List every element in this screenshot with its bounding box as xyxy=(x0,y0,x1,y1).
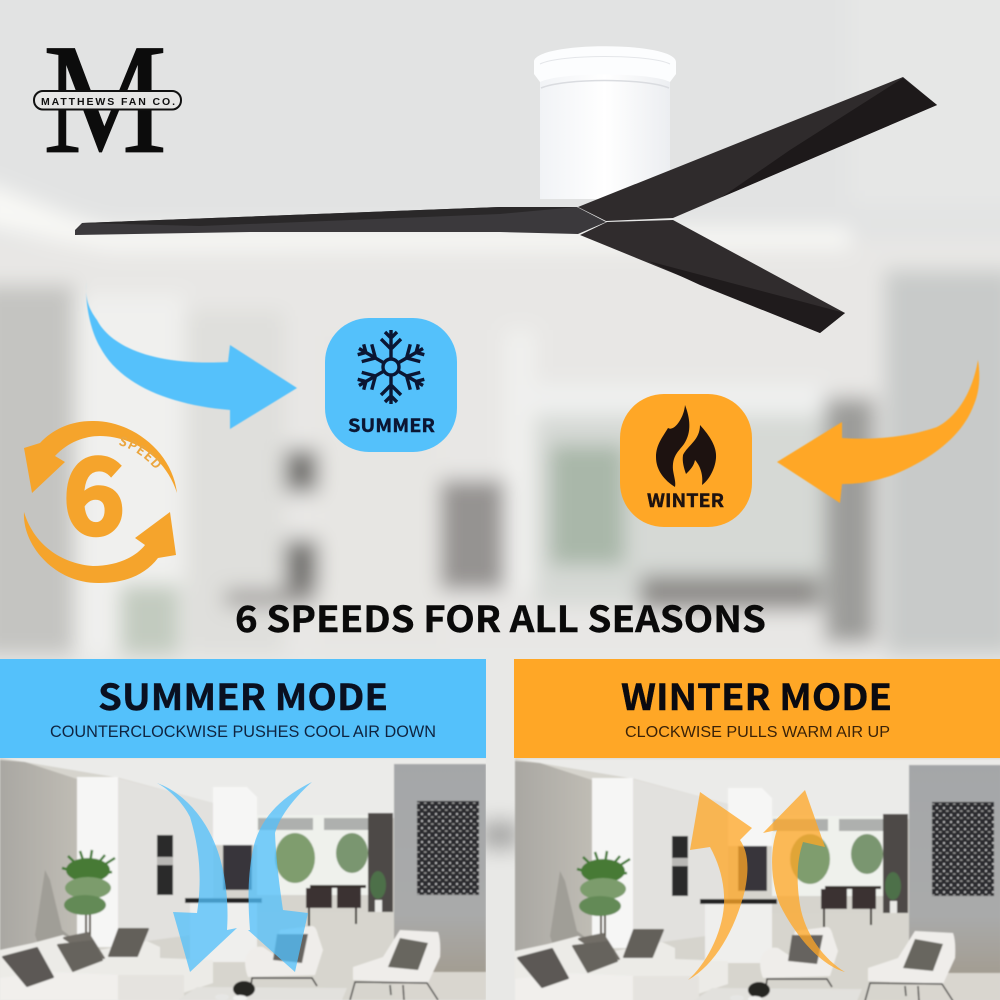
summer header: COUNTERCLOCKWISE PUSHES COOL AIR DOWN xyxy=(50,723,436,741)
winter header: WINTER MODE xyxy=(621,669,892,721)
bottom rotation arrow xyxy=(24,512,176,583)
summer header xyxy=(0,659,486,758)
summer header: SUMMER MODE xyxy=(98,669,388,721)
winter header: CLOCKWISE PULLS WARM AIR UP xyxy=(625,724,890,741)
panel: summer mode xyxy=(0,659,486,1000)
summer badge: SUMMER xyxy=(348,412,435,438)
fan blade lower xyxy=(580,220,845,333)
fan motor housing xyxy=(534,46,676,199)
panel: winter mode xyxy=(514,659,1000,1000)
6 speed icon xyxy=(24,413,177,583)
winter badge xyxy=(620,394,752,527)
top rotation arrow xyxy=(24,421,177,493)
winter room photo xyxy=(515,758,1000,1000)
summer badge xyxy=(325,318,457,452)
winter badge: WINTER xyxy=(647,487,724,513)
icon: snowflake xyxy=(354,330,428,404)
logo: Matthews Fan Co.: MATTHEWS FAN CO. xyxy=(41,96,175,108)
fan blade left xyxy=(75,207,606,235)
arrow: blue to summer xyxy=(86,280,297,429)
winter header xyxy=(514,659,1000,758)
fan xyxy=(75,46,937,333)
speed label: SPEED xyxy=(119,436,161,468)
arrow: orange to winter xyxy=(777,360,979,503)
summer air arrows xyxy=(157,782,312,972)
numeral 6: 6 xyxy=(63,413,125,565)
summer room photo xyxy=(0,757,486,1000)
title: 6 SPEEDS FOR ALL SEASONS xyxy=(235,591,766,643)
winter air arrows xyxy=(688,790,845,980)
fan blade right xyxy=(578,77,937,221)
icon: flame xyxy=(656,405,716,487)
logo: Matthews Fan Co.: M xyxy=(43,12,167,187)
